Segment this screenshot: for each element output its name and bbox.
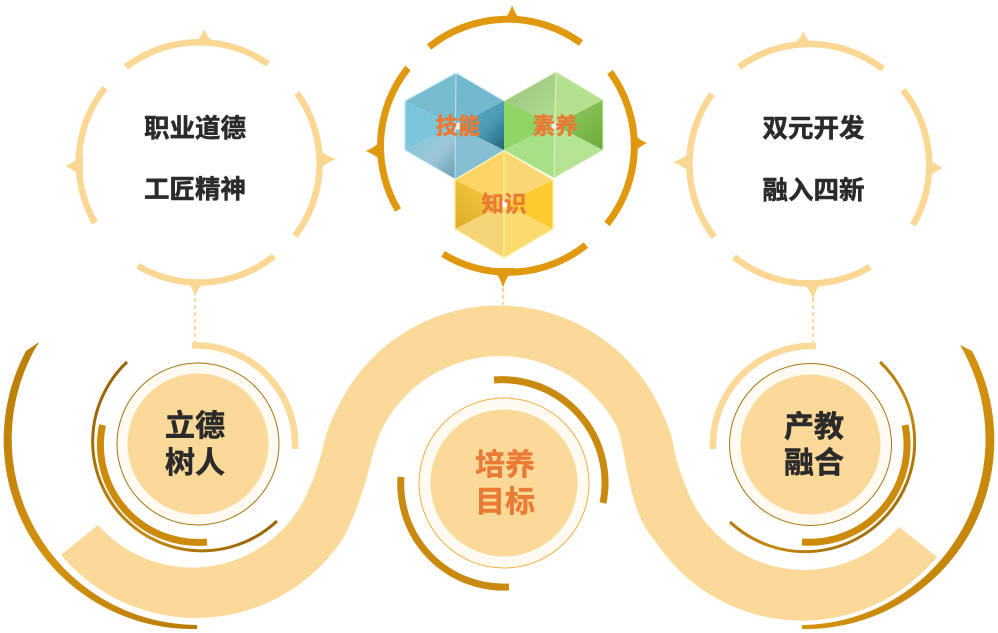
node: training goal: 目标	[475, 486, 535, 519]
ring: professional ethics: 职业道德	[144, 115, 246, 143]
dashed connector: right	[812, 298, 814, 342]
hexagon: skills: 技能	[435, 114, 481, 139]
outer crescent: left	[4, 342, 197, 629]
hexagon: knowledge: 知识	[481, 192, 527, 217]
ring: dual development	[673, 31, 943, 299]
hexagon: literacy	[504, 72, 603, 178]
ribbon: S-shaped band	[61, 305, 937, 621]
ring: professional ethics	[65, 29, 336, 297]
node: training goal	[401, 380, 605, 587]
node: training goal: 培养	[475, 449, 535, 482]
ring: professional ethics: 工匠精神	[144, 176, 246, 204]
hexagon: knowledge	[455, 151, 553, 258]
node: moral education: 树人	[165, 447, 225, 480]
node: industry-education integration: 融合	[784, 447, 844, 480]
dashed connector: middle	[502, 288, 504, 305]
dashed connector: left	[194, 298, 196, 342]
outer crescent: right	[802, 345, 994, 629]
hexagon: skills	[405, 73, 504, 179]
node: moral education: 立德	[165, 410, 225, 443]
hexagon: literacy: 素养	[532, 114, 578, 139]
ring: dual development: 融入四新	[762, 177, 865, 205]
ring: skills, literacy, knowledge	[366, 5, 647, 288]
node: industry-education integration: 产教	[784, 411, 844, 444]
node: moral education	[93, 345, 295, 551]
node: industry-education integration	[713, 346, 915, 552]
ring: dual development: 双元开发	[762, 115, 865, 143]
